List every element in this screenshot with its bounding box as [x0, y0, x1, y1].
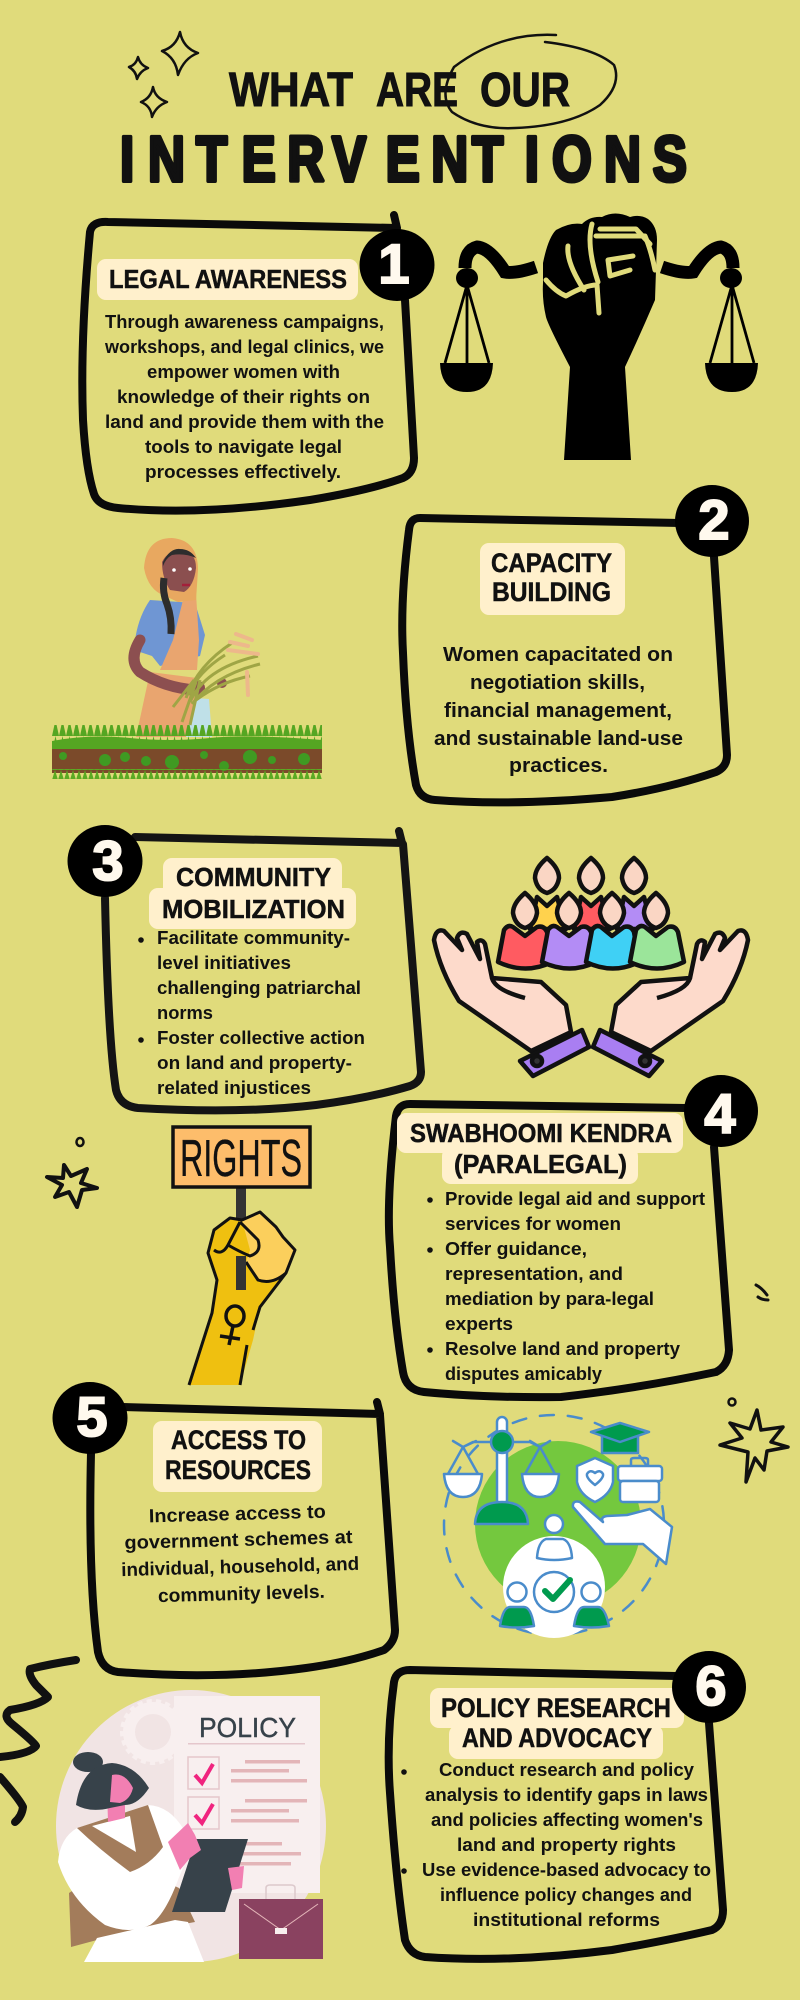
- bullet list: land and property rights: [457, 1835, 676, 1855]
- panel: community mobilization: [68, 825, 421, 1110]
- body text: practices.: [509, 755, 608, 777]
- bullet list: analysis to identify gaps in laws: [425, 1785, 708, 1805]
- icon: decorative marks right: [756, 1285, 768, 1300]
- icon: decorative star right: [720, 1398, 788, 1482]
- icon: left cupped hand: [434, 930, 589, 1076]
- bullet list: Facilitate community-: [157, 928, 350, 948]
- number badge 6: [672, 1651, 746, 1723]
- icon: female symbol: [220, 1306, 244, 1345]
- heading: CAPACITY: [491, 548, 612, 578]
- bullet list: mediation by para-legal: [445, 1289, 654, 1309]
- checklist: [188, 1757, 307, 1866]
- body text: financial management,: [444, 700, 672, 722]
- heading: [480, 543, 625, 615]
- panel: policy research and advocacy: [389, 1651, 746, 1959]
- bullet list: experts: [445, 1314, 513, 1334]
- heading: SWABHOOMI KENDRA: [410, 1118, 672, 1148]
- bullet list: services for women: [445, 1214, 621, 1234]
- title: WHAT: [229, 64, 353, 117]
- icon: decorative star left: [47, 1138, 97, 1207]
- bullet list: influence policy changes and: [440, 1885, 692, 1905]
- panel: legal awareness: [82, 215, 435, 511]
- icon: sparkles: [129, 32, 198, 117]
- heading: [397, 1113, 683, 1184]
- number badge 5: 5: [76, 1385, 108, 1448]
- heading: MOBILIZATION: [162, 894, 345, 924]
- title: [120, 64, 687, 195]
- panel frame: [402, 518, 727, 802]
- bullet list: [427, 1189, 705, 1384]
- icon: briefcase: [618, 1458, 662, 1502]
- body text: Increase access to: [149, 1502, 326, 1527]
- number badge 2: [675, 485, 749, 557]
- body text: land and provide them with the: [105, 412, 384, 432]
- number badge 1: [360, 229, 434, 301]
- icon: shield with heart: [577, 1458, 613, 1502]
- title: INTERVENTIONS: [120, 125, 687, 195]
- bullet list: [401, 1760, 711, 1930]
- body text: processes effectively.: [145, 462, 341, 482]
- heading: [153, 1421, 322, 1492]
- bullet list: on land and property-: [157, 1053, 352, 1073]
- heading: (PARALEGAL): [454, 1149, 627, 1179]
- heading: POLICY RESEARCH: [441, 1693, 671, 1723]
- heading: [149, 858, 356, 929]
- illustration: rights sign held by fist: RIGHTS: [180, 1130, 302, 1188]
- bullet list: Resolve land and property: [445, 1339, 680, 1359]
- body text: individual, household, and: [121, 1554, 359, 1581]
- bullet list: Conduct research and policy: [439, 1760, 694, 1780]
- body text: and sustainable land-use: [434, 728, 683, 750]
- icon: graduation cap: [591, 1423, 649, 1453]
- heading: [430, 1688, 684, 1759]
- heading: COMMUNITY: [176, 862, 331, 892]
- bullet list: level initiatives: [157, 953, 291, 973]
- bullet list: norms: [157, 1003, 213, 1023]
- icon: open hand: [573, 1502, 672, 1564]
- panel frame: [105, 831, 421, 1110]
- icon: justice scale: [444, 1417, 559, 1524]
- body text: knowledge of their rights on: [117, 387, 370, 407]
- illustration: woman harvesting in field: [52, 538, 322, 779]
- body text: Through awareness campaigns,: [105, 312, 384, 332]
- illustration: rights sign held by fist: [173, 1127, 310, 1385]
- panel frame: [389, 1104, 729, 1397]
- title: OUR: [480, 64, 570, 117]
- heading: [97, 259, 358, 300]
- icon: briefcase: [239, 1885, 323, 1959]
- panel frame: [82, 215, 414, 511]
- body text: negotiation skills,: [470, 672, 645, 694]
- hand-drawn circle around OUR: [445, 35, 616, 128]
- panel: swabhoomi kendra: [389, 1075, 758, 1397]
- icon: fist with justice scales: [440, 214, 758, 460]
- illustration: hands holding community: [434, 858, 748, 1076]
- body text: workshops, and legal clinics, we: [104, 337, 384, 357]
- bullet list: disputes amicably: [445, 1364, 602, 1384]
- body text: Women capacitated on: [443, 644, 673, 666]
- panel: access to resources: [52, 1382, 395, 1675]
- number badge 4: [684, 1075, 758, 1147]
- body text: [104, 312, 384, 482]
- heading: RESOURCES: [165, 1455, 311, 1485]
- icon: black squiggle: [0, 1660, 76, 1822]
- illustration: woman with policy document: [56, 1690, 326, 1962]
- icon: people with check: [500, 1515, 609, 1628]
- heading: ACCESS TO: [171, 1425, 306, 1455]
- number badge 3: 3: [92, 829, 124, 892]
- bullet list: Offer guidance,: [445, 1239, 587, 1259]
- body text: [120, 1501, 360, 1608]
- title: ARE: [376, 64, 458, 117]
- bullet list: challenging patriarchal: [157, 978, 361, 998]
- bullet list: institutional reforms: [473, 1910, 660, 1930]
- bullet list: Use evidence-based advocacy to: [422, 1860, 711, 1880]
- body text: tools to navigate legal: [145, 437, 342, 457]
- bullet list: [138, 928, 365, 1098]
- number badge 3: [68, 825, 142, 897]
- bullet list: related injustices: [157, 1078, 311, 1098]
- heading: AND ADVOCACY: [462, 1723, 652, 1753]
- number badge 1: 1: [378, 232, 410, 295]
- heading: LEGAL AWARENESS: [109, 264, 347, 294]
- panel frame: [90, 1402, 395, 1675]
- number badge 6: 6: [695, 1654, 727, 1717]
- bullet list: Provide legal aid and support: [445, 1189, 705, 1209]
- body text: community levels.: [158, 1582, 325, 1607]
- bullet list: representation, and: [445, 1264, 623, 1284]
- bullet list: Foster collective action: [157, 1028, 365, 1048]
- body text: empower women with: [147, 362, 340, 382]
- body text: government schemes at: [124, 1527, 353, 1554]
- number badge 5: [52, 1382, 128, 1454]
- panel: capacity building: [402, 485, 749, 802]
- number badge 4: 4: [704, 1082, 736, 1145]
- icon: right cupped hand: [593, 930, 748, 1076]
- bullet list: and policies affecting women's: [431, 1810, 703, 1830]
- body text: [434, 644, 683, 777]
- illustration: access to services: [444, 1415, 672, 1638]
- heading: BUILDING: [492, 577, 611, 607]
- panel frame: [389, 1670, 723, 1959]
- policy heading: POLICY: [199, 1712, 296, 1743]
- number badge 2: 2: [698, 488, 730, 551]
